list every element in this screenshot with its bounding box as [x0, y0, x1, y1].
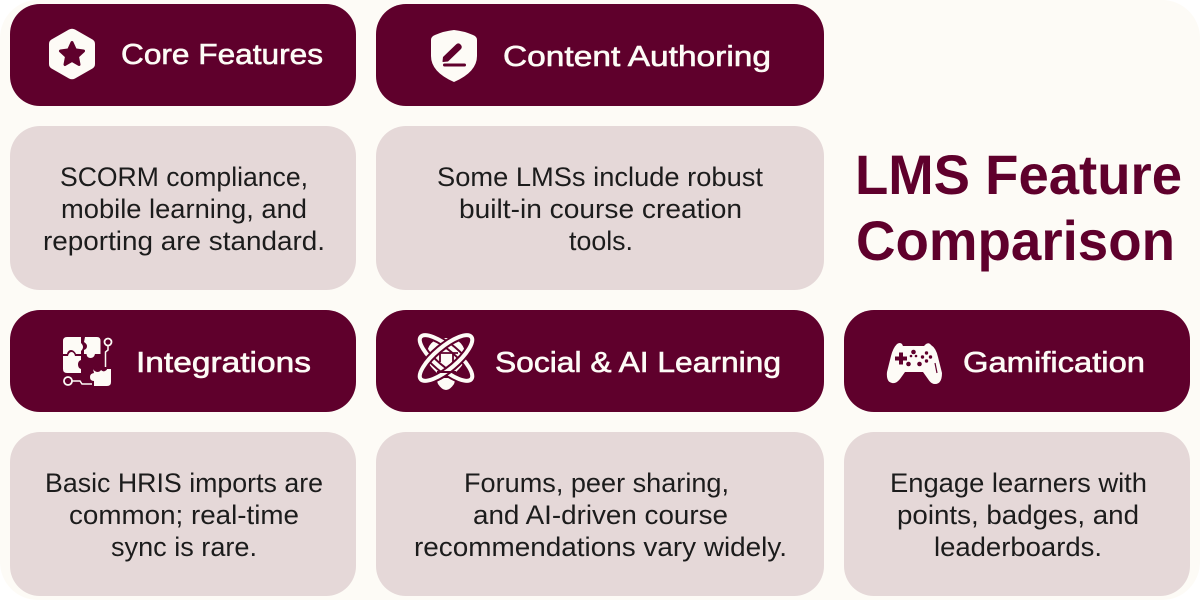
panel: content authoring header	[376, 4, 824, 106]
panel: gamification text	[844, 432, 1190, 596]
title	[855, 143, 1182, 272]
heading: social and AI learning: Social & AI Learning	[495, 347, 781, 379]
panel: gamification text: Engage learners with	[890, 468, 1147, 498]
panel: core features text: mobile learning, and	[61, 194, 307, 224]
title: LMS Feature	[855, 143, 1182, 206]
panel: social and AI learning text	[376, 432, 824, 596]
panel: core features header	[10, 4, 356, 106]
panel: core features text: SCORM compliance,	[60, 162, 308, 192]
panel: integrations text: Basic HRIS imports are	[45, 468, 323, 498]
panel: social and AI learning header	[376, 310, 824, 412]
panel: social and AI learning text: Forums, peer sharing,	[464, 468, 729, 498]
panel: integrations text	[10, 432, 356, 596]
icon: shield with pen	[431, 30, 477, 82]
panel: integrations text: sync is rare.	[111, 532, 257, 562]
icon: puzzle pieces	[63, 337, 112, 386]
heading: integrations: Integrations	[136, 347, 311, 379]
panel: gamification header	[844, 310, 1190, 412]
panel: core features text	[10, 126, 356, 290]
panel: content authoring text: built-in course creation	[459, 194, 742, 224]
panel: content authoring text: tools.	[569, 226, 633, 256]
icon: atom light bulb	[414, 328, 478, 390]
heading: gamification: Gamification	[963, 347, 1145, 379]
panel: social and AI learning text: and AI-driven course	[473, 500, 728, 530]
heading: core features: Core Features	[121, 39, 323, 71]
panel: integrations header	[10, 310, 356, 412]
panel: content authoring text: Some LMSs include robust	[437, 162, 764, 192]
panel: integrations text: common; real-time	[69, 500, 299, 530]
panel: gamification text: leaderboards.	[934, 532, 1102, 562]
heading: content authoring: Content Authoring	[503, 41, 771, 73]
panel: social and AI learning text: recommendations vary widely.	[414, 532, 787, 562]
title: Comparison	[856, 209, 1175, 272]
panel: content authoring text	[376, 126, 824, 290]
icon: game controller	[887, 343, 942, 384]
panel: gamification text: points, badges, and	[897, 500, 1139, 530]
panel: core features text: reporting are standard.	[43, 226, 325, 256]
icon: hexagon star	[49, 29, 95, 79]
